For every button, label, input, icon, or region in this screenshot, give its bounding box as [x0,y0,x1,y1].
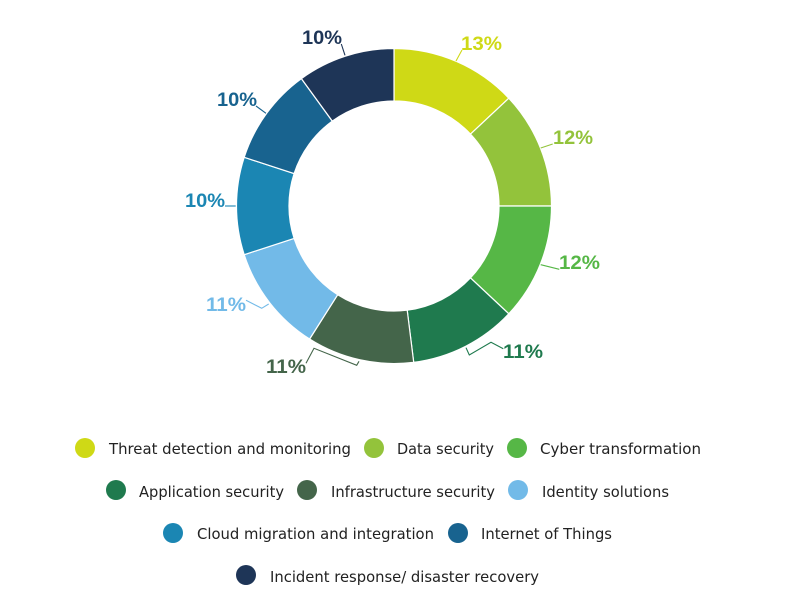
legend item: incident response/ disaster recovery: Incident response/ disaster recovery [270,568,539,586]
legend item: cyber transformation: Cyber transformation [540,440,701,458]
label: 11% infrastructure security [266,348,359,378]
label: 13%: 13% [461,33,502,55]
legend item: application security: Application security [139,483,284,501]
legend item: infrastructure security [297,480,495,501]
value labels and leader lines [185,27,600,378]
label: 10% cloud migration: 10% [185,190,225,212]
label: 10% internet of things: 10% [217,89,257,111]
label: 12% cyber transformation: 12% [559,252,600,274]
segment: identity solutions 11% [244,238,338,339]
segment: infrastructure security 11% [310,295,414,364]
legend item: identity solutions [508,480,669,501]
legend [75,438,701,586]
segment: incident response 10% [301,48,394,121]
legend item: cloud migration and integration: Cloud migration and integration [197,525,434,543]
label: 11% application security [466,341,543,363]
label: 11% infrastructure security: 11% [266,356,306,378]
segment: internet of things 10% [244,79,332,174]
label: 11% identity solutions: 11% [206,294,246,316]
legend item: identity solutions: Identity solutions [542,483,669,501]
legend item: data security: Data security [397,440,494,458]
legend item: internet of things: Internet of Things [481,525,612,543]
label: 11% application security: 11% [503,341,543,363]
segment: cloud migration and integration 10% [236,157,294,255]
label: 12% data security: 12% [553,127,593,149]
legend item: infrastructure security: Infrastructure security [331,483,495,501]
label: 13% [456,33,502,61]
legend item: internet of things [448,523,612,543]
label: 10% incident response: 10% [302,27,342,49]
donut chart [236,48,552,364]
segment: application security 11% [407,278,509,362]
label: 11% identity solutions [206,294,269,316]
legend item: application security [106,480,284,501]
segment: cyber transformation 12% [470,206,552,314]
segment: data security 12% [470,98,552,206]
segment: threat detection and monitoring 13% [394,48,509,134]
label: 12% cyber transformation [541,252,600,274]
legend item: threat detection and monitoring: Threat detection and monitoring [108,440,351,458]
legend item: data security [364,438,494,458]
